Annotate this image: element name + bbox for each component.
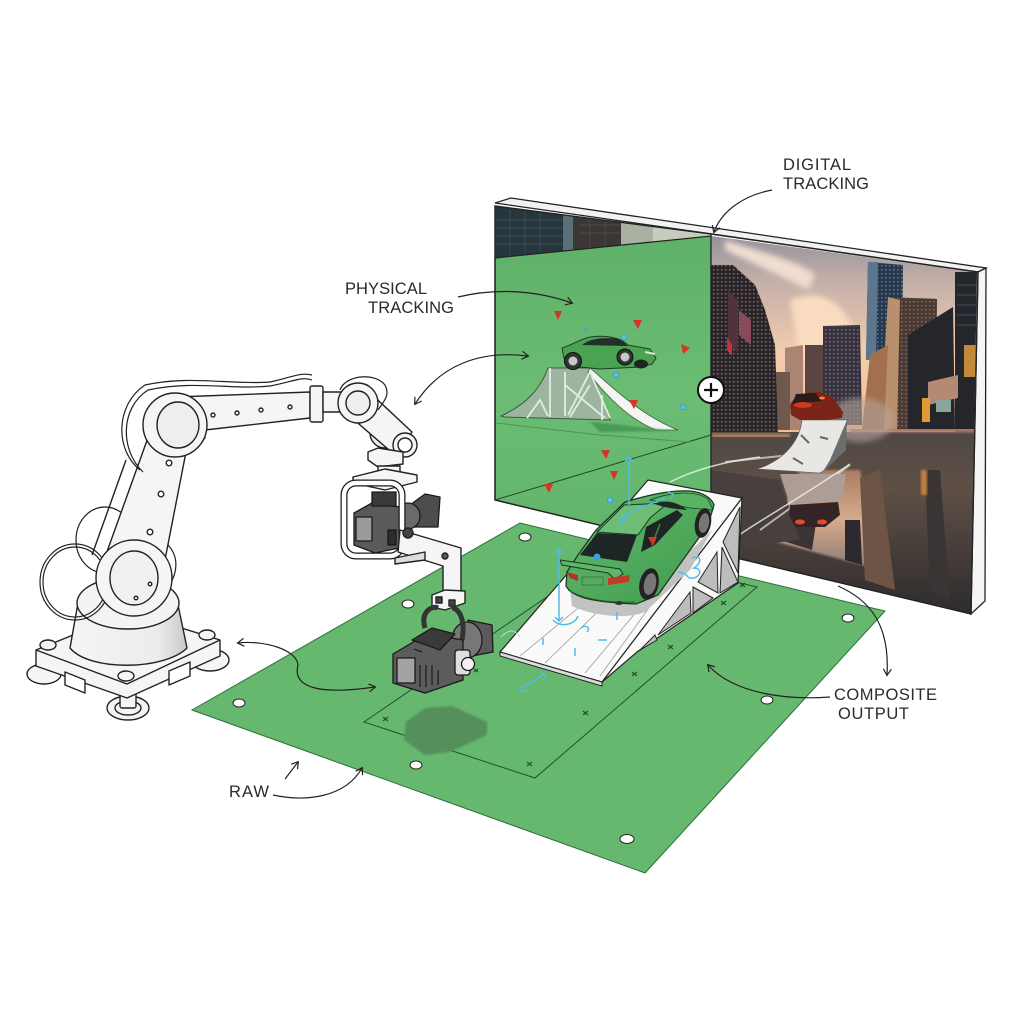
road (711, 432, 981, 622)
blue digital tracking glyphs (501, 457, 700, 692)
LED wall (495, 198, 986, 622)
rear lens (410, 494, 440, 527)
label: physical tracking: PHYSICAL (345, 280, 427, 298)
wrist joint (393, 433, 417, 457)
arrow: raw small (285, 762, 298, 779)
clouds (725, 240, 815, 290)
upper arm (175, 392, 310, 440)
screen green car (562, 336, 656, 370)
wrist flange (368, 448, 403, 467)
robot arm (27, 374, 417, 720)
label: composite output: OUTPUT (838, 705, 909, 723)
arrow: raw to mat (273, 768, 362, 798)
physical green car (560, 491, 714, 605)
forearm (370, 418, 400, 448)
roof (597, 503, 668, 535)
arrow: physical tracking (458, 291, 572, 303)
wall outline (495, 206, 978, 614)
street lights at horizon (712, 430, 975, 436)
light trail to composite (670, 457, 850, 545)
body (393, 634, 463, 693)
reflected ramp (780, 474, 846, 505)
annotation arrows (238, 190, 887, 798)
arrow: composite to mat (708, 665, 830, 698)
front wheel (693, 507, 713, 539)
pedestal (70, 600, 187, 665)
upper cables (122, 374, 312, 470)
handle (424, 607, 463, 640)
deck (500, 480, 742, 682)
label: raw: RAW (229, 783, 269, 801)
wall thickness (495, 198, 986, 272)
lens hood (468, 620, 493, 656)
bumper (568, 590, 635, 602)
deck lines (520, 530, 705, 676)
side windows (641, 510, 683, 552)
hip joint (96, 540, 172, 616)
reflected red car (789, 502, 840, 527)
spray (826, 398, 894, 442)
label: digital tracking: DIGITAL (783, 156, 851, 174)
composite photo half (711, 230, 981, 622)
red car composite (790, 392, 843, 420)
camera body (354, 503, 400, 553)
green screen half (495, 236, 711, 552)
left city strip (496, 206, 710, 258)
camera two (393, 607, 493, 693)
rear window (580, 533, 637, 562)
ramp side frame (602, 498, 742, 682)
inner tracking rectangle (364, 581, 757, 778)
collar (310, 386, 323, 422)
red marker on car (648, 537, 657, 546)
gimbal cradle and camera one (344, 483, 440, 556)
arrow: digital tracking (714, 190, 772, 232)
rear wheel (636, 566, 662, 602)
hood (650, 493, 713, 510)
label: composite output: COMPOSITE (834, 686, 937, 704)
stunt ramp in composite (757, 420, 847, 473)
physical ramp (500, 480, 742, 686)
composite plus badge (698, 377, 724, 403)
elbow joint (338, 383, 378, 423)
frame (344, 483, 402, 556)
arrow: screen to robot (415, 355, 528, 404)
spoiler (560, 560, 623, 579)
arrow: robot to camera (238, 642, 375, 690)
right towers (866, 262, 903, 360)
camera shadow (404, 706, 487, 755)
label: digital tracking: TRACKING (783, 175, 869, 193)
shadow under car (570, 530, 712, 616)
far skyline (785, 345, 803, 430)
base feet (27, 649, 229, 720)
screen stunt ramp (501, 368, 678, 432)
blue tracking dots on screen (584, 328, 686, 503)
mat white dots (233, 533, 854, 844)
shoulder joint (143, 393, 207, 457)
truss panels (640, 507, 740, 650)
base plate (36, 612, 220, 698)
red tracking markers on screen (544, 311, 690, 493)
mat cross marks (383, 583, 745, 766)
arrow: wall to composite (838, 586, 887, 675)
green floor lines (495, 435, 711, 500)
road reflections (776, 468, 864, 567)
floor mat (192, 523, 885, 873)
lower arm (104, 432, 205, 595)
support bracket (395, 528, 465, 610)
lower cable loops (40, 507, 176, 620)
left street blocks (711, 265, 778, 432)
tail lights (567, 572, 578, 581)
label: physical tracking: TRACKING (368, 299, 454, 317)
